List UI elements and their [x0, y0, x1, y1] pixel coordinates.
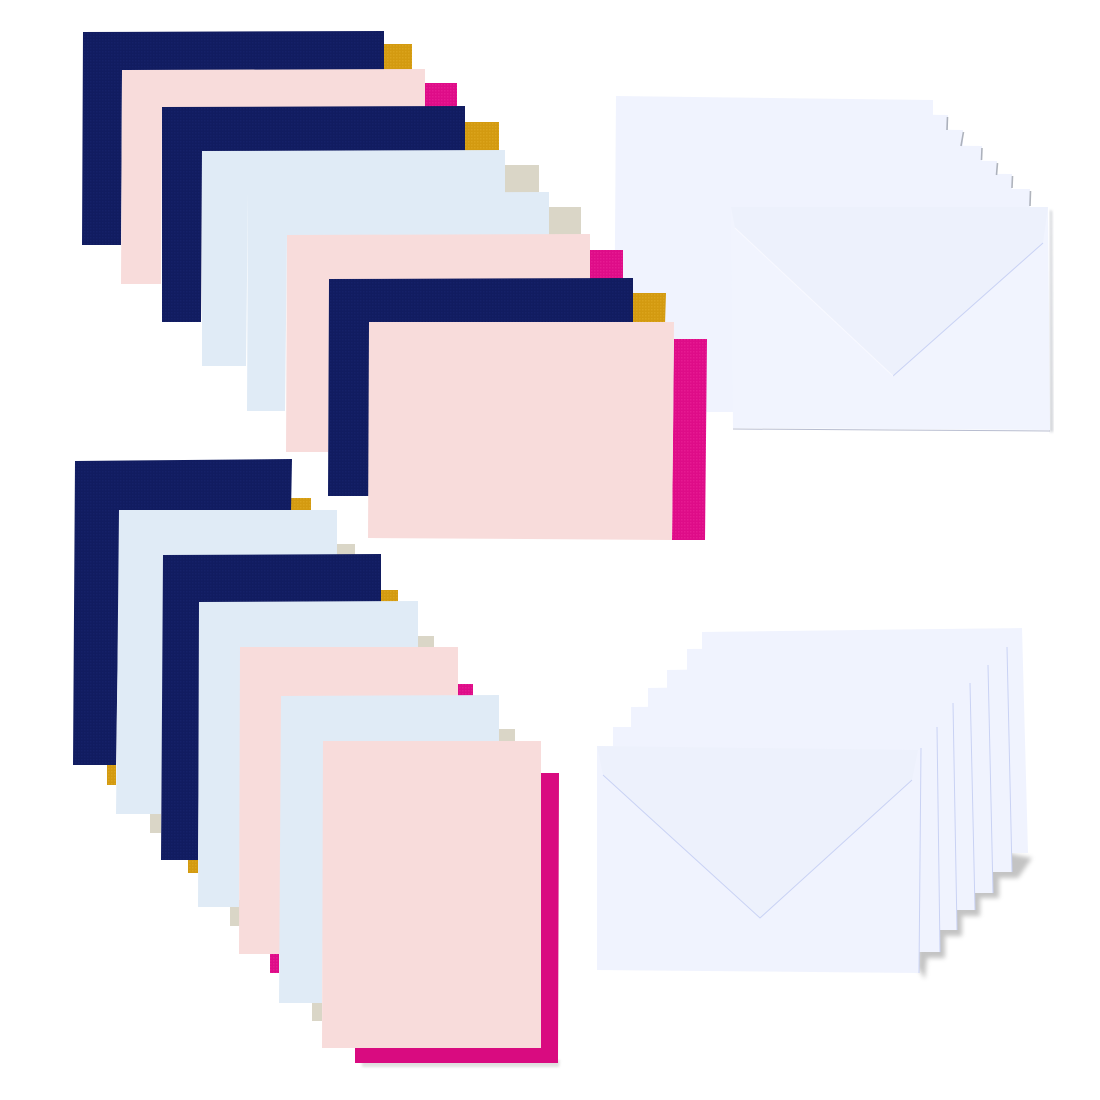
card 7: navy with gold liner	[328, 278, 666, 496]
flap	[597, 746, 918, 918]
card 8: pink with magenta liner	[368, 322, 707, 540]
card 1: navy with gold liner	[82, 31, 412, 245]
envelope shadows	[918, 850, 1032, 979]
card 4: light blue with beige liner	[198, 601, 434, 926]
card 6: pink with magenta liner	[286, 234, 623, 452]
back envelopes	[614, 96, 1030, 412]
flap	[731, 207, 1048, 376]
card 3: navy with gold liner	[161, 554, 398, 873]
card 3: navy with gold liner	[162, 106, 499, 322]
card 6: light blue with beige liner	[279, 695, 515, 1021]
card 7: pink with magenta liner	[322, 741, 560, 1067]
back envelopes	[613, 628, 1028, 952]
bottom-left stack of portrait cards	[73, 459, 560, 1067]
card 1: navy with gold liner	[73, 459, 311, 785]
top-right stack of envelopes	[614, 96, 1053, 432]
card 2: pink with magenta liner	[121, 69, 457, 284]
top-left stack of landscape cards	[82, 31, 707, 540]
card 4: light blue with beige liner	[202, 150, 539, 366]
card 5: pink with magenta liner	[239, 647, 473, 973]
card 5: light blue with beige liner	[247, 192, 581, 411]
card 2: light blue with beige liner	[116, 510, 355, 833]
front envelope	[597, 746, 921, 973]
bottom-right stack of envelopes	[597, 628, 1032, 979]
front envelope	[731, 207, 1053, 432]
